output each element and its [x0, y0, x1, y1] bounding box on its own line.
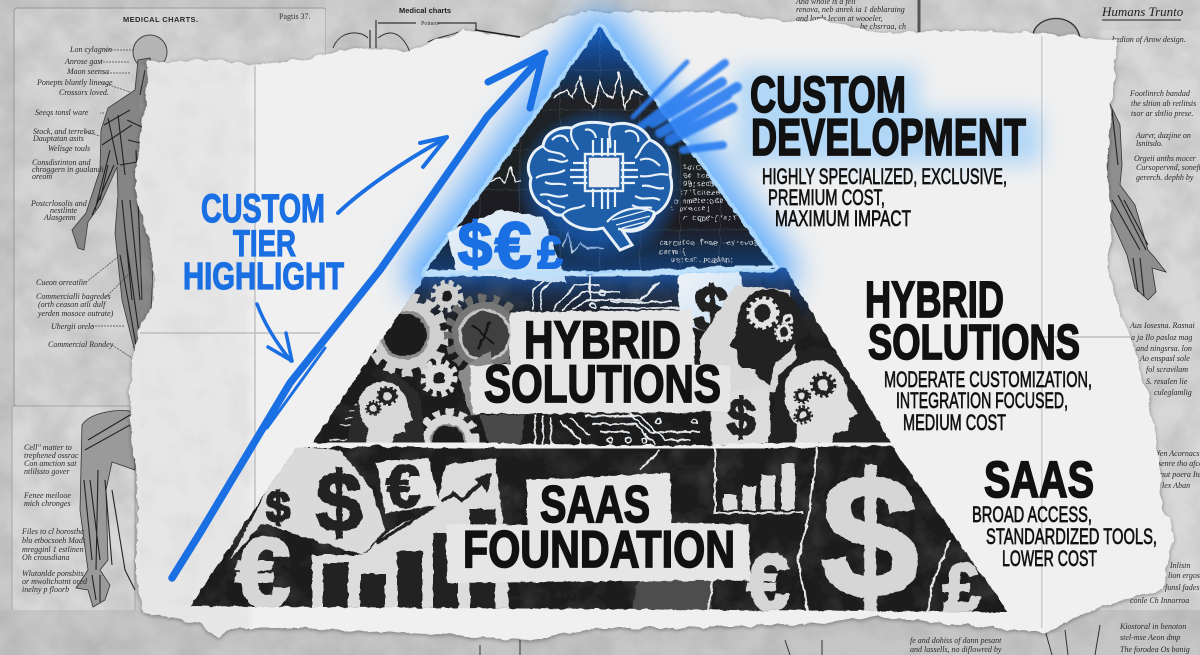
torn gray patch behind hybrid label [458, 350, 492, 416]
blue arrow pointing down [257, 304, 292, 361]
bottom sheet: faint notes and sketches: fe and dohiss of dann pesant [910, 636, 1002, 645]
anatomy labels and chart heading, left sheet: Maon seensa [66, 67, 109, 76]
dollar paper scrap, upper: $ [694, 272, 730, 346]
anatomy labels and chart heading, left sheet: (orth ceason atli dulf [38, 300, 107, 309]
anatomy labels and chart heading, left sheet: Stock, and terrebas [33, 127, 95, 136]
anatomy labels and chart heading, left sheet: Dauptatan asits [32, 134, 84, 143]
anatomy figure: lower left arm with notes: Files to cl borostha [21, 527, 84, 536]
callout: custom tier highlight: CUSTOM [201, 187, 325, 231]
text block: custom development [750, 66, 1026, 231]
euro lower right: € [746, 538, 790, 626]
anatomy figure: full body chart [72, 35, 167, 352]
blue glow around top tier [410, 27, 790, 312]
anatomy labels and chart heading, left sheet: yerden mosoce outrate) [37, 309, 114, 318]
anatomy figure: right arm with notes: The forodea Os bonig [1120, 645, 1190, 654]
anatomy figure: right arm with notes: Ifen Acornacs [1154, 449, 1200, 458]
anatomy figure: right arm with notes: Aurvr, dazjine on [1135, 131, 1191, 140]
blue glow around custom development heading [736, 68, 1041, 164]
code snippet: :7'lcneeem [679, 190, 725, 198]
anatomy figure: right arm with notes: Inlistn [1169, 561, 1190, 570]
text block: hybrid solutions: INTEGRATION FOCUSED, [896, 388, 1068, 413]
anatomy figure: lower left arm with notes: ntlilssto gover [24, 467, 70, 476]
anatomy figure: right arm with notes: Ao enspasl sole [1139, 354, 1190, 363]
circuit board, left edge [330, 404, 358, 442]
small blue arrow towards tip [338, 137, 447, 213]
anatomy labels and chart heading, left sheet: Alasgenm [43, 213, 76, 222]
text block: hybrid solutions: HYBRID [865, 271, 1004, 328]
anatomy labels and chart heading, left sheet: Crossors loved. [59, 88, 109, 97]
anatomy figure: right arm with notes: lion ergos [1168, 571, 1200, 580]
text block: saas: LOWER COST [1002, 546, 1097, 571]
torn dollar scrap: $ [316, 455, 362, 549]
saas foundation centre label: SAAS [540, 476, 650, 534]
anatomy labels and chart heading, left sheet: Ponepts bluntly lineage [36, 78, 113, 87]
anatomy labels and chart heading, left sheet: Uhergii orelo [51, 322, 94, 331]
anatomy figure: lower left arm with notes: mich chronges [24, 499, 71, 508]
torn chart scrap [312, 458, 510, 617]
bottom sheet: faint notes and sketches: and lassells, no diflowred by [910, 645, 1002, 654]
code snippet: 6¢ tce [683, 173, 710, 181]
hybrid solutions centre label: SOLUTIONS [484, 355, 721, 414]
currency scrap: dollar euro pound: $ [458, 211, 492, 280]
text block: hybrid solutions: SOLUTIONS [868, 316, 1080, 370]
dollar paper scrap, upper [677, 272, 743, 332]
top sheet: kidney diagram and medical charts heading: be chsrraa, ch [860, 22, 906, 31]
large crumpled dollar: $ [821, 439, 919, 635]
paper mottling and fold lines [140, 36, 1130, 628]
anatomy figure: right arm with notes: gererch. dephh by [1136, 173, 1194, 182]
icon: bar chart outline on dark [715, 447, 803, 513]
anatomy labels and chart heading, left sheet: Consdistinton and [32, 158, 91, 167]
anatomy labels and chart heading, left sheet: chroggern in gualandi [32, 165, 104, 174]
anatomy figure: right arm with notes: fol scravilam [1146, 365, 1188, 374]
anatomy figure: lower left arm with notes: Con amction sat [24, 459, 77, 468]
anatomy figure: right arm with notes: Kiostoral in benoton [1119, 622, 1186, 631]
torn dollar scrap [230, 447, 385, 560]
text block: custom development: CUSTOM [750, 66, 906, 123]
anatomy labels and chart heading, left sheet: Postcrlosolis and [30, 199, 88, 208]
anatomy figure: right arm with notes: lex Aban [1162, 481, 1190, 490]
code snippet [659, 164, 758, 264]
anatomy figure: right arm with notes: Cursopervnd, soneft [1136, 163, 1200, 172]
ecg waveforms [490, 72, 643, 253]
grid lines [478, 29, 748, 270]
anatomy figure: lower left arm with notes: mregginl 1 estlinen [22, 545, 83, 554]
anatomy figure: lower left arm with notes: or mwoltchotnt ored [22, 577, 88, 586]
anatomy labels and chart heading, left sheet: oreom [32, 172, 52, 181]
circuit board, lower [534, 412, 700, 446]
anatomy labels and chart heading, left sheet: Lon cylagnin [69, 45, 112, 54]
hybrid solutions tier of pyramid [312, 268, 894, 447]
anatomy figure: lower left arm with notes: Oh crousdiana [22, 553, 69, 562]
anatomy figure: right arm with notes: s and ningsrsa. lon [1131, 344, 1192, 353]
bottom sheet: faint notes and sketches [480, 625, 1100, 655]
saas foundation centre label: FOUNDATION [463, 521, 735, 579]
hybrid solutions centre label [470, 310, 730, 414]
dollar paper scrap, lower: $ [727, 389, 756, 447]
text block: custom development: HIGHLY SPECIALIZED, EXCLUSIVE, [762, 164, 1007, 189]
anatomy figure: lower left arm with notes: blu etbocsoeh Madt [22, 536, 86, 545]
code snippet: carcutce-fome ·ey·evotts [659, 240, 767, 248]
torn divider: middle and bottom tiers [296, 443, 893, 448]
gray torn patch near foundation label [632, 580, 712, 612]
text block: custom development: DEVELOPMENT [751, 109, 1026, 167]
anatomy figure: lower left arm with notes: Fenee meilooe [23, 491, 71, 500]
anatomy figure: lower left arm with notes: Cell" matter to [24, 443, 72, 452]
text block: hybrid solutions [865, 271, 1092, 435]
text block: saas [972, 451, 1157, 571]
anatomy figure: lower left arm with notes: trephened ossrac [24, 451, 79, 460]
anatomy figure: right arm with notes: culeglamlig [1154, 388, 1192, 397]
light backing behind dark head [700, 285, 800, 395]
anatomy labels and chart heading, left sheet: nestlinte [50, 206, 78, 215]
euro on dark corner: € [236, 517, 290, 627]
code snippet: os:cat.pcadan; [671, 257, 734, 265]
dollar paper scrap, lower [710, 392, 771, 446]
icon: light head on dark, right [768, 345, 895, 446]
text block: hybrid solutions: MEDIUM COST [903, 410, 1006, 435]
icon: light head with gears, left [345, 372, 425, 445]
callout: custom tier highlight: HIGHLIGHT [183, 256, 344, 298]
code snippet: 99;sed5 [683, 181, 715, 189]
top sheet: kidney diagram and medical charts heading [333, 0, 1080, 52]
callout: custom tier highlight: TIER [233, 223, 296, 264]
anatomy figure: right arm with notes: Orgeii anths mocer [1134, 154, 1197, 163]
top sheet: kidney diagram and medical charts heading: renova, neb anrek ia 1 deblaraing [796, 5, 905, 14]
saas foundation tier of pyramid [190, 445, 1008, 613]
anatomy labels and chart heading, left sheet: Seeqs tonsl ware [35, 108, 89, 117]
top sheet: kidney diagram and medical charts heading: Medical charts [399, 6, 451, 15]
blue crayon scribble [633, 62, 737, 150]
anatomy labels and chart heading, left sheet: Pagtis 37. [279, 12, 311, 21]
code snippet: : ovecce) [670, 206, 711, 214]
anatomy labels and chart heading, left sheet: Commercial Rondey [48, 340, 114, 349]
anatomy figure: lower left arm with notes: inelny p floorb [22, 585, 69, 594]
anatomy figure: lower left arm with notes [21, 411, 135, 607]
anatomy figure: right arm with notes: conle Ch Innorroa [1130, 596, 1189, 605]
hybrid solutions centre label: HYBRID [524, 311, 681, 370]
anatomy figure: lower left arm with notes: Wlutonlde ponsbits [22, 569, 84, 578]
currency scrap: dollar euro pound: £ [537, 227, 563, 278]
anatomy figure: right arm with notes: bedion of Arow design. [1112, 35, 1186, 44]
code snippet: cerm { [659, 249, 686, 257]
text block: saas: BROAD ACCESS, [972, 502, 1092, 527]
saas foundation centre label [446, 473, 750, 583]
torn crack strokes [640, 447, 950, 612]
text block: custom development: MAXIMUM IMPACT [775, 206, 911, 231]
circuit board, upper [533, 275, 680, 310]
anatomy figure: right arm with notes: stel-mse Aeon dmp [1120, 633, 1180, 642]
anatomy figure: right arm with notes: Footlinrch bandad [1129, 89, 1191, 98]
icon: dark head with white gears [730, 289, 802, 385]
currency scrap: dollar euro pound [447, 208, 567, 283]
torn dollar scrap: $ [266, 483, 290, 532]
pound lower right: £ [944, 550, 981, 624]
top sheet: kidney diagram and medical charts heading: Poiners [421, 21, 440, 27]
anatomy labels and chart heading, left sheet: Cueon orreatlin [36, 278, 87, 287]
anatomy figure: right arm with notes: S. resalen lie [1146, 377, 1188, 386]
text block: custom development: PREMIUM COST, [768, 185, 885, 210]
callout: custom tier highlight [183, 187, 344, 298]
text block: saas: SAAS [984, 451, 1094, 508]
anatomy labels and chart heading, left sheet: Commercialli bagredes [36, 292, 111, 301]
anatomy figure: right arm with notes: Humans Trunto [1101, 4, 1184, 19]
code snippet: o omete:ose [674, 198, 724, 206]
gear cluster [371, 280, 514, 442]
anatomy labels and chart heading, left sheet [30, 12, 311, 360]
anatomy figure: right arm with notes: the sltion ab retlitsis [1131, 99, 1196, 108]
top sheet: kidney diagram and medical charts heading: and lords lecon at wooeler, [796, 14, 883, 23]
torn euro scrap: € [386, 453, 420, 520]
anatomy figure: right arm with notes: Aus Iosesna. Rasnai [1129, 321, 1195, 330]
anatomy labels and chart heading, left sheet: Anrose gast [64, 57, 103, 66]
code snippet: 1g;c.s [683, 164, 710, 172]
torn divider: top and middle tiers [425, 266, 780, 276]
anatomy labels and chart heading, left sheet: Welisge touls [48, 144, 90, 153]
anatomy labels and chart heading, left sheet: MEDICAL CHARTS. [123, 15, 198, 24]
code snippet: r tqpe-['a;r [683, 215, 737, 223]
anatomy figure: right arm with notes: lsnitsdo. [1136, 139, 1163, 148]
anatomy figure: right arm with notes: a ja Ilo pasloz mag [1131, 333, 1192, 342]
currency scrap: dollar euro pound: € [495, 208, 531, 282]
text block: hybrid solutions: MODERATE CUSTOMIZATION, [884, 367, 1092, 392]
anatomy figure: right arm with notes: tsor ar sbtlio prese. [1131, 109, 1193, 118]
custom development tier of pyramid [420, 25, 780, 275]
anatomy figure: right arm with notes [1101, 4, 1200, 654]
torn euro scrap [376, 458, 439, 514]
anatomy figure: right arm with notes: funsl fades [1165, 583, 1199, 592]
big rising blue arrow [172, 53, 545, 578]
icon: brain with processor chip [514, 107, 686, 263]
